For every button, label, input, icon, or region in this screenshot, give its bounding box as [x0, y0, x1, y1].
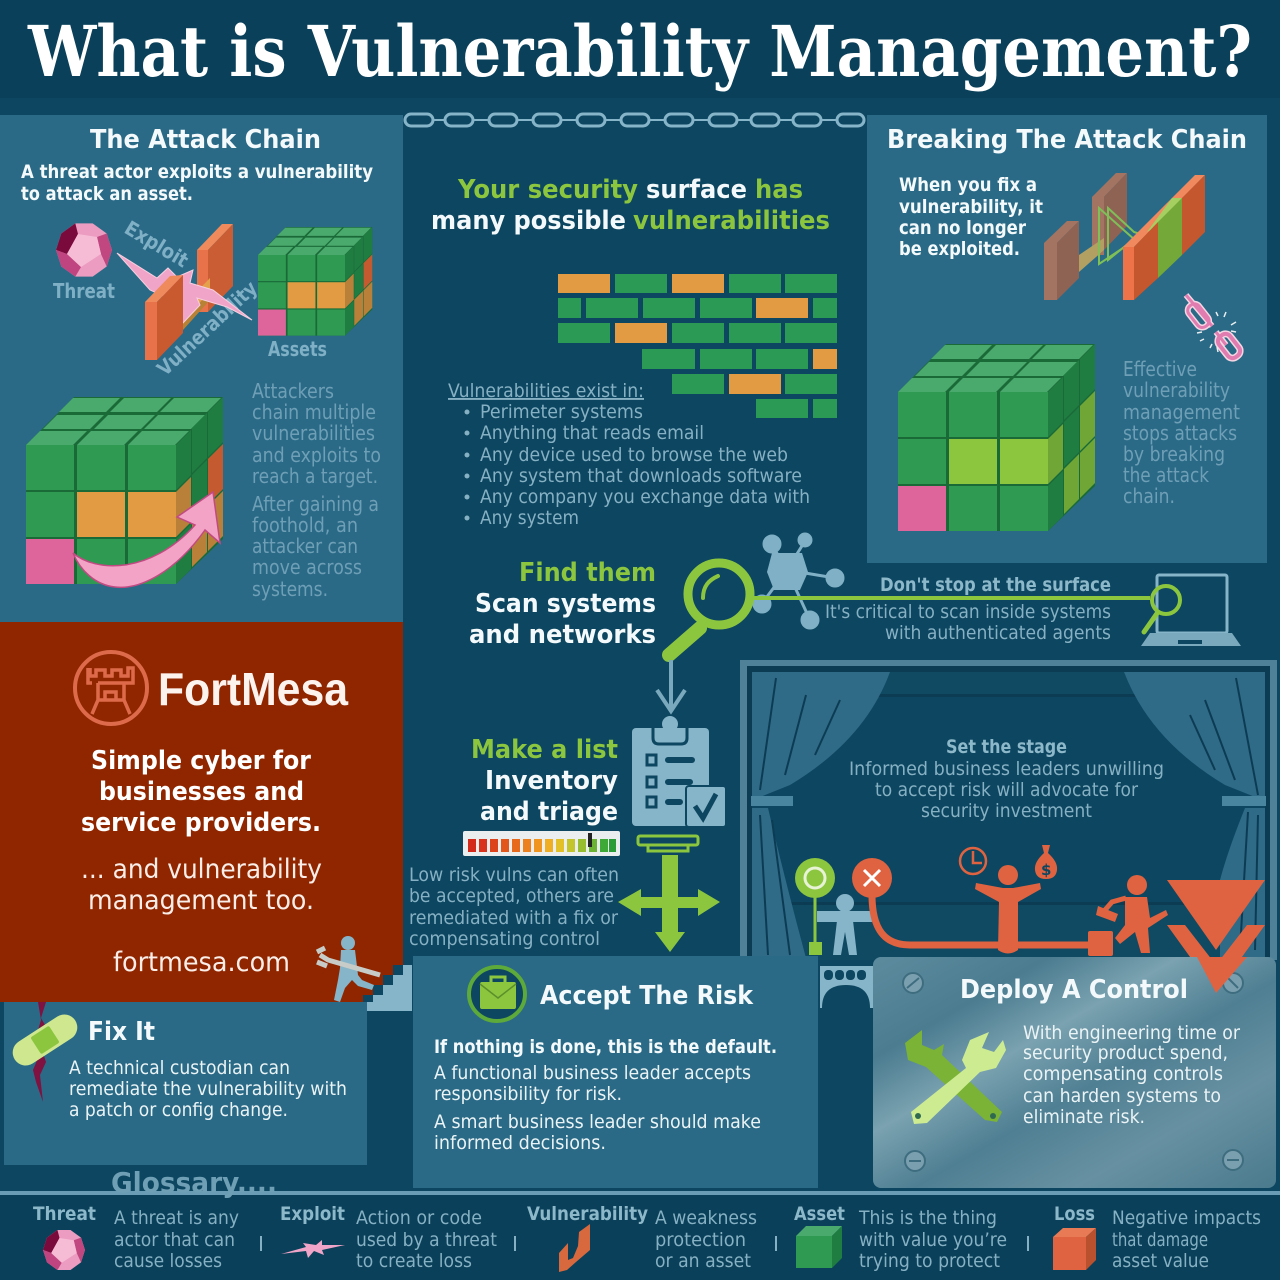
text: don't stop at the surface: Don't stop at the surface: [880, 574, 1111, 596]
icon: stairs: [367, 965, 412, 1011]
body text: responsibility for risk.: [434, 1083, 622, 1105]
glossary: threat: cause losses: [114, 1250, 222, 1272]
heading: security surface: Your security: [457, 175, 638, 205]
glossary: threat: A threat is any: [114, 1207, 239, 1229]
lead text: [21, 161, 374, 205]
glossary: exploit: Exploit: [280, 1203, 345, 1225]
body text: effective management: chain.: [1123, 484, 1175, 508]
heading: fix it: Fix It: [88, 1017, 155, 1047]
body text: If nothing is done, this is the default.: [434, 1036, 777, 1058]
heading: security surface: has: [755, 175, 803, 205]
icon: money bag: $: [1041, 861, 1051, 879]
icon: briefcase badge: [469, 967, 525, 1021]
body text: effective management: stops attacks: [1123, 421, 1237, 445]
glossary: exploit: to create loss: [356, 1250, 472, 1272]
body text: can harden systems to: [1023, 1085, 1221, 1107]
right curtain: [1124, 672, 1266, 958]
body text: attackers: move across: [252, 555, 362, 579]
body text: attackers: Attackers: [252, 379, 334, 403]
body text: compensating controls: [1023, 1063, 1223, 1085]
text: set the stage: to accept risk will advocate for: [875, 779, 1138, 801]
icon: small asset cube: [258, 227, 372, 336]
icon: broken chain: [1185, 295, 1243, 361]
body text: security product spend,: [1023, 1042, 1228, 1064]
body text: informed decisions.: [434, 1132, 606, 1154]
text: don't stop at the surface: It's critical to scan inside systems: [825, 601, 1111, 623]
icon: fortmesa logo: [75, 652, 147, 724]
glossary: threat: [33, 1203, 262, 1272]
glossary: asset: with value you’re: [859, 1229, 1007, 1251]
lead text: to attack an asset.: [21, 183, 193, 205]
text: don't stop at the surface: [825, 574, 1111, 644]
subline: management too.: [88, 885, 314, 916]
text: don't stop at the surface: with authenticated agents: [885, 622, 1111, 644]
body text: effective management: Effective: [1123, 357, 1197, 381]
lead text: A threat actor exploits a vulnerability: [21, 161, 374, 183]
list: vulnerabilities exist in: [448, 380, 810, 529]
icon: runner with wrench: [317, 936, 380, 1002]
body text: effective management: by breaking: [1123, 442, 1225, 466]
label: exploit: Exploit: [120, 216, 193, 273]
body text: effective management: management: [1123, 400, 1240, 424]
body text: attackers: After gaining a: [252, 492, 379, 516]
text: make a list: Make a list: [471, 735, 618, 765]
text: make a list: and triage: [480, 797, 618, 827]
body text: a patch or config change.: [69, 1099, 288, 1121]
text: set the stage: [849, 736, 1164, 822]
text: low risk vulns: compensating control: [409, 928, 600, 950]
body text: [69, 1057, 347, 1121]
tagline: service providers.: [81, 808, 321, 838]
icon: repaired wall: [1044, 173, 1205, 300]
icon: threat gem: [56, 223, 112, 277]
body text: effective management: [1123, 357, 1240, 508]
icon: chain across top: [404, 114, 864, 126]
glossary: vulnerability: Vulnerability: [527, 1203, 649, 1225]
body text: [434, 1036, 777, 1154]
glossary: exploit: used by a threat: [356, 1229, 497, 1251]
text: find them: and networks: [469, 620, 656, 650]
left curtain: [751, 672, 890, 958]
body text: remediate the vulnerability with: [69, 1078, 347, 1100]
list: vulnerabilities exist in: Vulnerabilities exist in:: [448, 380, 644, 402]
tagline: [81, 746, 321, 838]
panel: deploy a control: [873, 957, 1276, 1188]
heading: security surface: many possible: [431, 206, 626, 236]
glossary: vulnerability: protection: [655, 1229, 746, 1251]
panel: glossary: [0, 1166, 1280, 1280]
website: fortmesa.com: [113, 947, 290, 978]
lead text: be exploited.: [899, 238, 1020, 260]
icon: laptop with magnifier: [1141, 575, 1241, 646]
panel: stage: [740, 660, 1277, 993]
text: low risk vulns: [409, 864, 619, 950]
glossary: loss: Negative impacts: [1112, 1207, 1261, 1229]
text: find them: [469, 558, 656, 650]
glossary: asset: Asset: [794, 1203, 845, 1225]
text: set the stage: security investment: [921, 800, 1092, 822]
screws: [903, 973, 1243, 1171]
panel: breaking the attack chain: [867, 115, 1267, 563]
icon: fixed cube: [898, 344, 1095, 531]
icon: crack: [33, 1002, 48, 1102]
body text: attackers: foothold, an: [252, 513, 358, 537]
list: vulnerabilities exist in: Any system: [480, 507, 579, 529]
glossary: loss: [1053, 1203, 1261, 1272]
label: vulnerability: Vulnerability: [152, 276, 262, 381]
body text: attackers: reach a target.: [252, 464, 378, 488]
tagline: Simple cyber for: [91, 746, 311, 776]
glossary: vulnerability: A weakness: [655, 1207, 757, 1229]
heading: breaking the attack chain: Breaking The Attack Chain: [887, 125, 1247, 155]
icon: large magnifier with scan line: [669, 563, 1150, 655]
icon: rear wall: [183, 224, 233, 330]
body text: attackers: systems.: [252, 577, 328, 601]
panel: accept the risk: [413, 956, 818, 1188]
body text: attackers: vulnerabilities: [252, 421, 375, 445]
glossary: asset: This is the thing: [858, 1207, 997, 1229]
body text: attackers: [252, 379, 381, 601]
subline: ... and vulnerability: [81, 854, 322, 885]
label: threat: Threat: [53, 279, 115, 303]
glossary: vulnerability: [527, 1203, 777, 1272]
icon: running worker: [1088, 875, 1168, 956]
text: set the stage: Set the stage: [946, 736, 1067, 758]
icon: bridge: [820, 966, 873, 1188]
icon: red chevrons: [1167, 880, 1265, 993]
label: assets: Assets: [268, 337, 327, 361]
list: vulnerabilities exist in: Any company you exchange data with: [480, 486, 810, 508]
panel: fortmesa brand: [0, 622, 403, 1002]
icon: brick wall: [558, 274, 837, 418]
text: find them: Find them: [519, 558, 656, 588]
glossary: threat: actor that can: [114, 1229, 235, 1251]
text: set the stage: Informed business leaders unwilling: [849, 758, 1164, 780]
body text: attackers: chain multiple: [252, 400, 376, 424]
icon: bystander figure: [817, 894, 872, 955]
glossary: loss: asset value: [1112, 1250, 1209, 1272]
heading: security surface: vulnerabilities: [633, 206, 830, 236]
icon: red reject sign and pipe: [852, 858, 1095, 945]
body text: eliminate risk.: [1023, 1106, 1145, 1128]
icon: risk gauge: [463, 831, 620, 856]
heading: security surface: [431, 175, 830, 236]
heading: the attack chain: The Attack Chain: [90, 125, 321, 155]
lead text: When you fix a: [899, 174, 1037, 196]
panel: the attack chain: [0, 115, 403, 622]
icon: green accept sign: [795, 858, 835, 955]
list: vulnerabilities exist in: Any system that downloads software: [480, 465, 802, 487]
icon: red chevron tip: [1197, 957, 1247, 993]
icon: pedestal: [638, 836, 698, 851]
glossary: asset: trying to protect: [859, 1250, 1000, 1272]
list: vulnerabilities exist in: Anything that reads email: [480, 422, 704, 444]
glossary: vulnerability: or an asset: [655, 1250, 751, 1272]
body text: effective management: vulnerability: [1123, 378, 1230, 402]
arrow: decision cross: [618, 855, 720, 952]
lead text: vulnerability, it: [899, 196, 1043, 218]
icon: exploit lightning bolt: [117, 253, 252, 323]
text: low risk vulns: remediated with a fix or: [409, 907, 618, 929]
body text: With engineering time or: [1023, 1022, 1240, 1044]
glossary: exploit: [280, 1203, 516, 1272]
body text: effective management: the attack: [1123, 463, 1209, 487]
text: low risk vulns: Low risk vulns can often: [409, 864, 619, 886]
list: vulnerabilities exist in: Perimeter systems: [480, 401, 643, 423]
arrow: scan to list: [657, 660, 685, 711]
body text: A technical custodian can: [69, 1057, 290, 1079]
text: make a list: Inventory: [485, 766, 618, 796]
lead text: [899, 174, 1043, 260]
text: make a list: [471, 735, 618, 827]
icon: crossed wrenches: [905, 1030, 1006, 1124]
panel: fix it: [4, 1002, 367, 1165]
icon: clipboard: [632, 716, 726, 827]
icon: large cube with attack path: [26, 397, 223, 587]
subline: [81, 854, 322, 916]
tagline: businesses and: [99, 777, 304, 807]
text: low risk vulns: be accepted, others are: [409, 885, 614, 907]
body text: [1023, 1022, 1240, 1128]
heading: deploy a control: Deploy A Control: [960, 975, 1188, 1005]
glossary: threat: Threat: [33, 1203, 96, 1225]
glossary: asset: [794, 1203, 1029, 1272]
glossary: loss: Loss: [1054, 1203, 1095, 1225]
body text: A smart business leader should make: [434, 1111, 761, 1133]
icon: network hub: [753, 533, 844, 629]
text: find them: Scan systems: [475, 589, 656, 619]
icon: clock: [960, 848, 986, 874]
heading: accept the risk: Accept The Risk: [540, 981, 754, 1011]
logo wordmark: FortMesa: [158, 663, 348, 715]
glossary: loss: that damage: [1112, 1229, 1208, 1251]
heading: glossary: Glossary....: [111, 1166, 277, 1199]
title band: [0, 0, 1280, 98]
body text: A functional business leader accepts: [434, 1062, 751, 1084]
icon: money bag: [1035, 845, 1057, 879]
body text: attackers: and exploits to: [252, 443, 381, 467]
glossary: exploit: Action or code: [356, 1207, 482, 1229]
lead text: can no longer: [899, 217, 1027, 239]
icon: bandage: [8, 1009, 82, 1071]
body text: attackers: attacker can: [252, 534, 358, 558]
list: vulnerabilities exist in: Any device used to browse the web: [480, 444, 788, 466]
icon: business leader figure: [975, 865, 1041, 954]
icon: front wall: [145, 275, 183, 360]
heading: security surface: surface: [646, 175, 747, 205]
